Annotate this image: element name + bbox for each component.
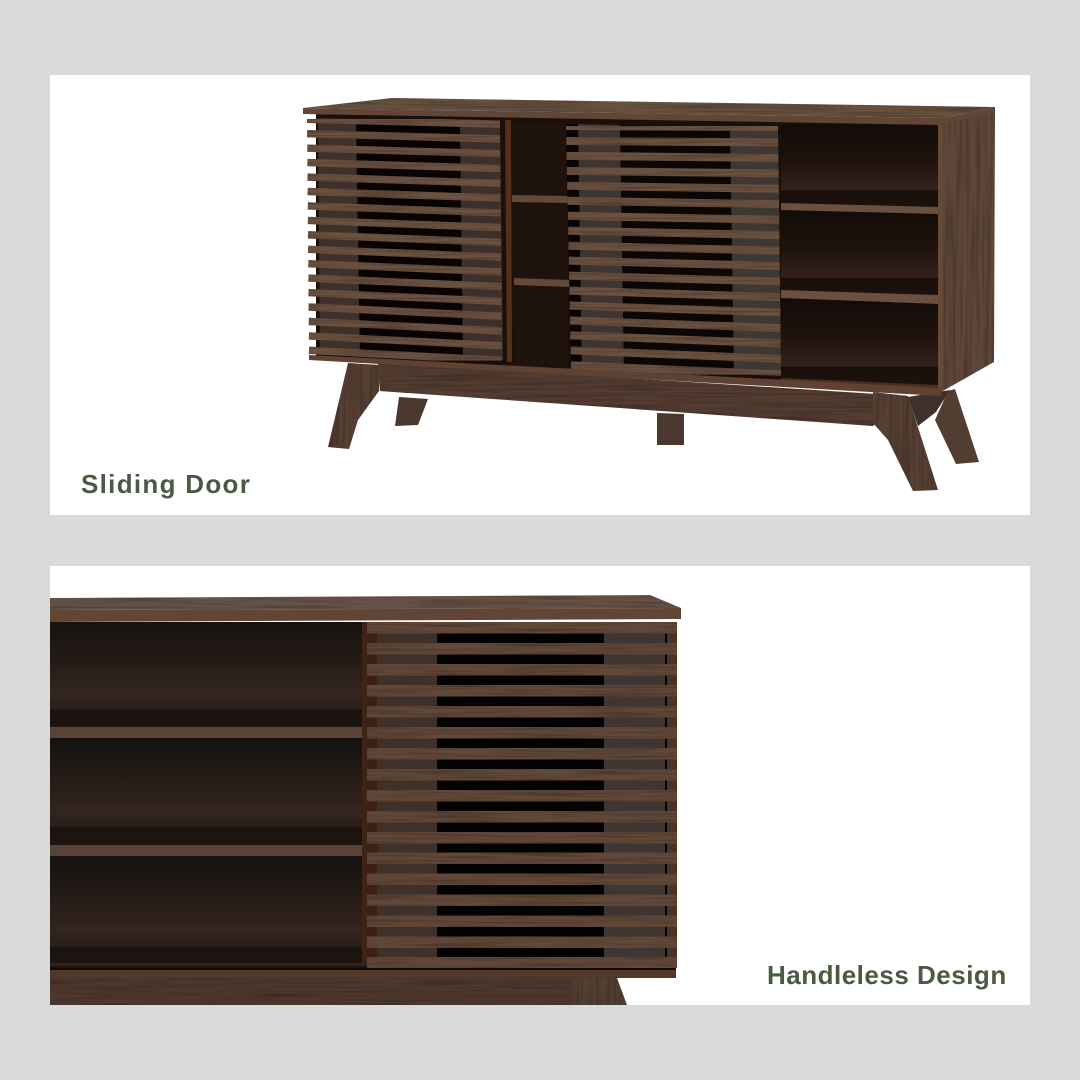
side panel bbox=[941, 111, 995, 392]
centre sliding door slats bbox=[566, 126, 781, 374]
product photo: close-up of door bbox=[50, 595, 681, 1005]
middle compartment shelves bbox=[505, 120, 570, 368]
heading: Sliding Door: Sliding Door bbox=[81, 469, 251, 499]
base apron bbox=[50, 978, 572, 1005]
sliding door slats bbox=[367, 622, 677, 968]
panel: sliding door bbox=[50, 75, 1030, 515]
top plate bbox=[50, 595, 681, 622]
left sliding door back bbox=[318, 118, 503, 360]
open shelves bbox=[50, 622, 367, 969]
centre sliding door back bbox=[566, 124, 781, 376]
cabinet front interior bbox=[316, 114, 941, 389]
bottom front edge bbox=[309, 355, 941, 396]
left sliding door slats bbox=[307, 119, 502, 360]
front legs bbox=[328, 363, 938, 491]
product photo: full sideboard bbox=[303, 98, 995, 491]
panel: handleless design bbox=[50, 566, 1030, 1005]
leg top bbox=[572, 978, 627, 1005]
heading: Handleless Design: Handleless Design bbox=[767, 960, 1007, 990]
infographic canvas bbox=[50, 75, 1030, 1005]
base apron bbox=[378, 362, 908, 426]
rear legs bbox=[395, 389, 979, 464]
top plate bbox=[303, 98, 995, 125]
lower rail bbox=[50, 963, 676, 978]
sliding door back bbox=[367, 622, 677, 968]
right compartment shelves bbox=[781, 124, 943, 392]
